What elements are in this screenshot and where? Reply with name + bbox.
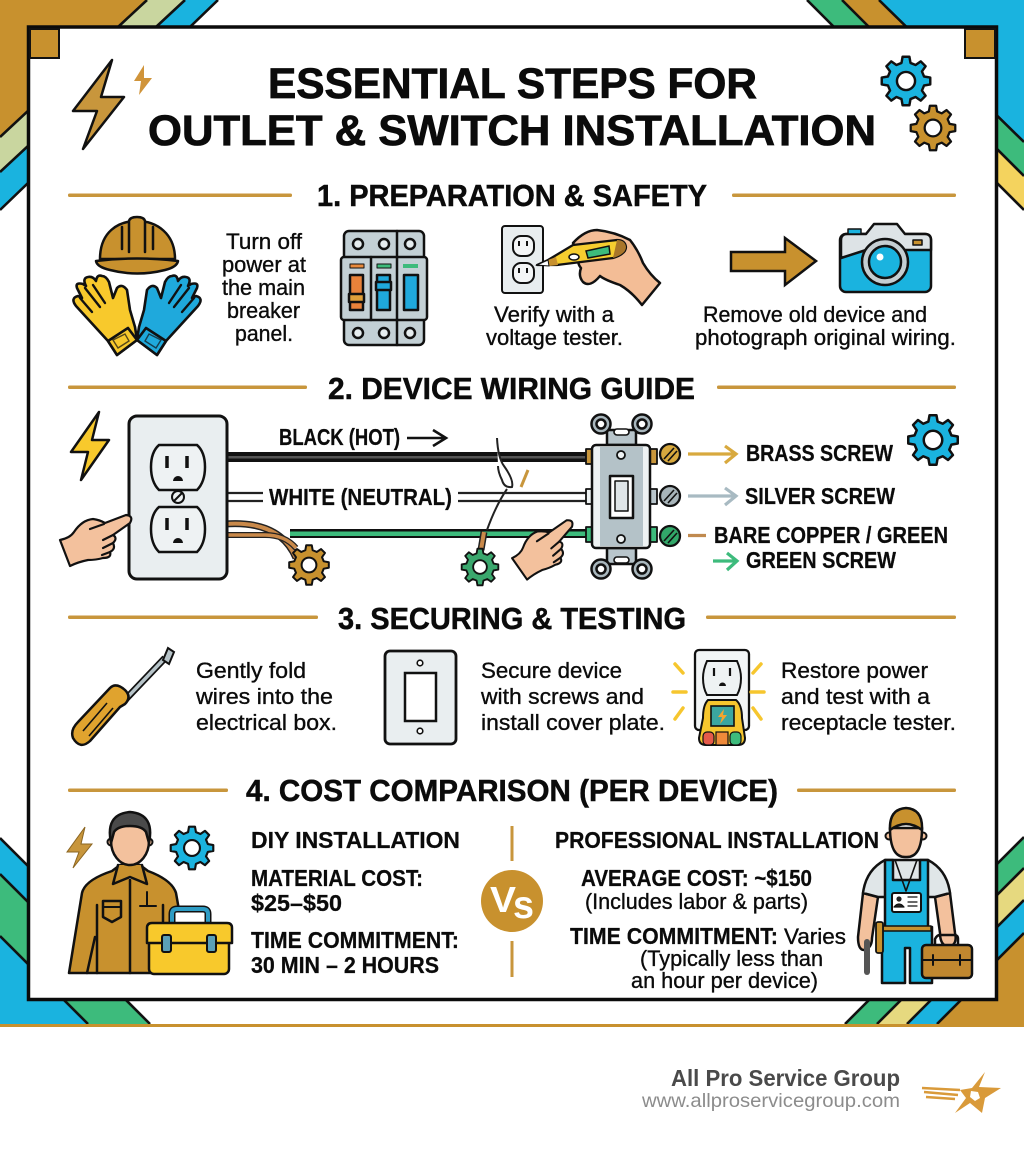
icon: breaker panel bbox=[341, 231, 427, 345]
text: restore power: receptacle tester. bbox=[781, 710, 956, 735]
text: DIY installation: TIME COMMITMENT: bbox=[251, 927, 459, 953]
text: turn off power: power at bbox=[222, 252, 306, 277]
footer brand: All Pro Service Group bbox=[671, 1065, 900, 1091]
text: verify: Verify with a bbox=[494, 302, 615, 327]
section 1 heading bbox=[68, 178, 956, 213]
icon: gold bolt bbox=[67, 827, 92, 868]
icon: gold gear bbox=[911, 106, 955, 150]
title bbox=[148, 60, 876, 155]
text: verify: voltage tester. bbox=[486, 325, 623, 350]
text: turn off power bbox=[222, 229, 306, 346]
icon: green gear bbox=[462, 549, 498, 585]
icon: left pointing hand bbox=[60, 515, 131, 566]
icon: hard hat bbox=[96, 217, 178, 274]
icon: camera bbox=[840, 224, 931, 292]
arrow: green bbox=[713, 553, 737, 570]
bottom gold rule bbox=[0, 1024, 1024, 1027]
icon: blue gear left bbox=[171, 827, 213, 869]
text: professional installation: an hour per device) bbox=[631, 968, 818, 993]
text: gently fold: Gently fold bbox=[196, 658, 306, 683]
icon: screwdriver bbox=[72, 648, 174, 745]
text: professional installation bbox=[555, 827, 879, 993]
icon: green screw bbox=[660, 526, 680, 546]
label: bare copper: BARE COPPER / GREEN bbox=[714, 522, 948, 548]
text: professional installation: AVERAGE COST: ~$150 bbox=[581, 865, 812, 891]
icon: outlet with voltage tester bbox=[502, 226, 660, 305]
text: turn off power: breaker bbox=[227, 298, 300, 323]
icon: star logo bbox=[922, 1072, 1001, 1113]
icon: yellow toolbox bbox=[147, 909, 232, 974]
icon: cover plate bbox=[385, 651, 456, 744]
text: turn off power: the main bbox=[222, 275, 305, 300]
text: DIY installation: DIY INSTALLATION bbox=[251, 827, 460, 853]
arrow: gold right bbox=[731, 238, 816, 285]
text: secure device bbox=[480, 658, 665, 735]
icon: yellow bolt bbox=[71, 412, 109, 480]
footer brand: www.allproservicegroup.com bbox=[641, 1090, 900, 1112]
icon: receptacle tester bbox=[673, 650, 764, 745]
label: brass screw: BRASS SCREW bbox=[746, 440, 893, 466]
text: remove old device bbox=[695, 302, 956, 350]
label: green screw: GREEN SCREW bbox=[746, 547, 896, 573]
text: professional installation: TIME COMMITMENT: bbox=[570, 923, 778, 949]
icon: receptacle plate bbox=[129, 416, 227, 579]
text: remove old device: photograph original wiring. bbox=[695, 325, 956, 350]
text: DIY installation: MATERIAL COST: bbox=[251, 865, 423, 891]
versus divider bbox=[481, 826, 543, 977]
blue glove bbox=[137, 276, 201, 355]
icon: brown gear bbox=[289, 545, 329, 585]
title: OUTLET & SWITCH INSTALLATION bbox=[148, 107, 876, 155]
text: DIY installation: $25–$50 bbox=[251, 890, 342, 916]
text: gently fold: electrical box. bbox=[196, 710, 337, 735]
text: secure device: install cover plate. bbox=[481, 710, 665, 735]
arrow: silver bbox=[688, 488, 736, 505]
icon: title lightning bolts bbox=[73, 60, 152, 149]
text: professional installation: Varies bbox=[784, 924, 846, 949]
section 4 heading: 4. COST COMPARISON (PER DEVICE) bbox=[246, 773, 778, 808]
text: secure device: with screws and bbox=[480, 684, 644, 709]
icon: toggle switch bbox=[586, 414, 657, 578]
text: turn off power: Turn off bbox=[226, 229, 303, 254]
text: professional installation: (Includes labor & parts) bbox=[585, 889, 808, 914]
arrow: copper dash bbox=[688, 534, 706, 537]
text: verify bbox=[486, 302, 623, 350]
icon: professional worker bbox=[858, 808, 972, 983]
versus divider: V bbox=[490, 879, 516, 920]
section 2 heading bbox=[68, 371, 956, 406]
versus divider: s bbox=[513, 884, 534, 927]
label: silver screw: SILVER SCREW bbox=[745, 483, 895, 509]
icon: blue gear bbox=[882, 57, 930, 105]
arrow: brass bbox=[688, 446, 736, 463]
section 3 heading bbox=[68, 601, 956, 636]
text: DIY installation bbox=[251, 827, 460, 978]
icon: brass screw bbox=[660, 444, 680, 464]
label: white neutral: WHITE (NEUTRAL) bbox=[269, 484, 452, 510]
section 4 heading bbox=[68, 773, 956, 808]
text: professional installation: PROFESSIONAL INSTALLATION bbox=[555, 827, 879, 853]
main white panel bbox=[28, 27, 996, 1000]
icon: silver screw bbox=[660, 486, 680, 506]
section 1 heading: 1. PREPARATION & SAFETY bbox=[317, 178, 707, 213]
text: gently fold: wires into the bbox=[195, 684, 333, 709]
text: turn off power: panel. bbox=[235, 321, 293, 346]
section 3 heading: 3. SECURING & TESTING bbox=[338, 601, 686, 636]
text: gently fold bbox=[195, 658, 337, 735]
text: DIY installation: 30 MIN – 2 HOURS bbox=[251, 952, 439, 978]
corner square top right bbox=[965, 29, 995, 58]
wires bbox=[225, 438, 592, 558]
footer brand bbox=[641, 1065, 900, 1112]
corner square top left bbox=[30, 29, 59, 58]
section 2 heading: 2. DEVICE WIRING GUIDE bbox=[328, 371, 695, 406]
icon: right pointing hand bbox=[506, 519, 583, 582]
title: ESSENTIAL STEPS FOR bbox=[268, 60, 757, 108]
icon: blue gear right bbox=[908, 415, 958, 465]
text: restore power bbox=[781, 658, 956, 735]
text: restore power: and test with a bbox=[781, 684, 931, 709]
text: professional installation: (Typically less than bbox=[640, 946, 823, 971]
text: restore power: Restore power bbox=[781, 658, 928, 683]
text: remove old device: Remove old device and bbox=[703, 302, 927, 327]
icon: DIY person bbox=[69, 812, 190, 973]
text: secure device: Secure device bbox=[481, 658, 622, 683]
label: black hot: BLACK (HOT) bbox=[279, 424, 400, 450]
yellow glove bbox=[73, 276, 137, 355]
icon: safety gloves bbox=[73, 276, 201, 355]
